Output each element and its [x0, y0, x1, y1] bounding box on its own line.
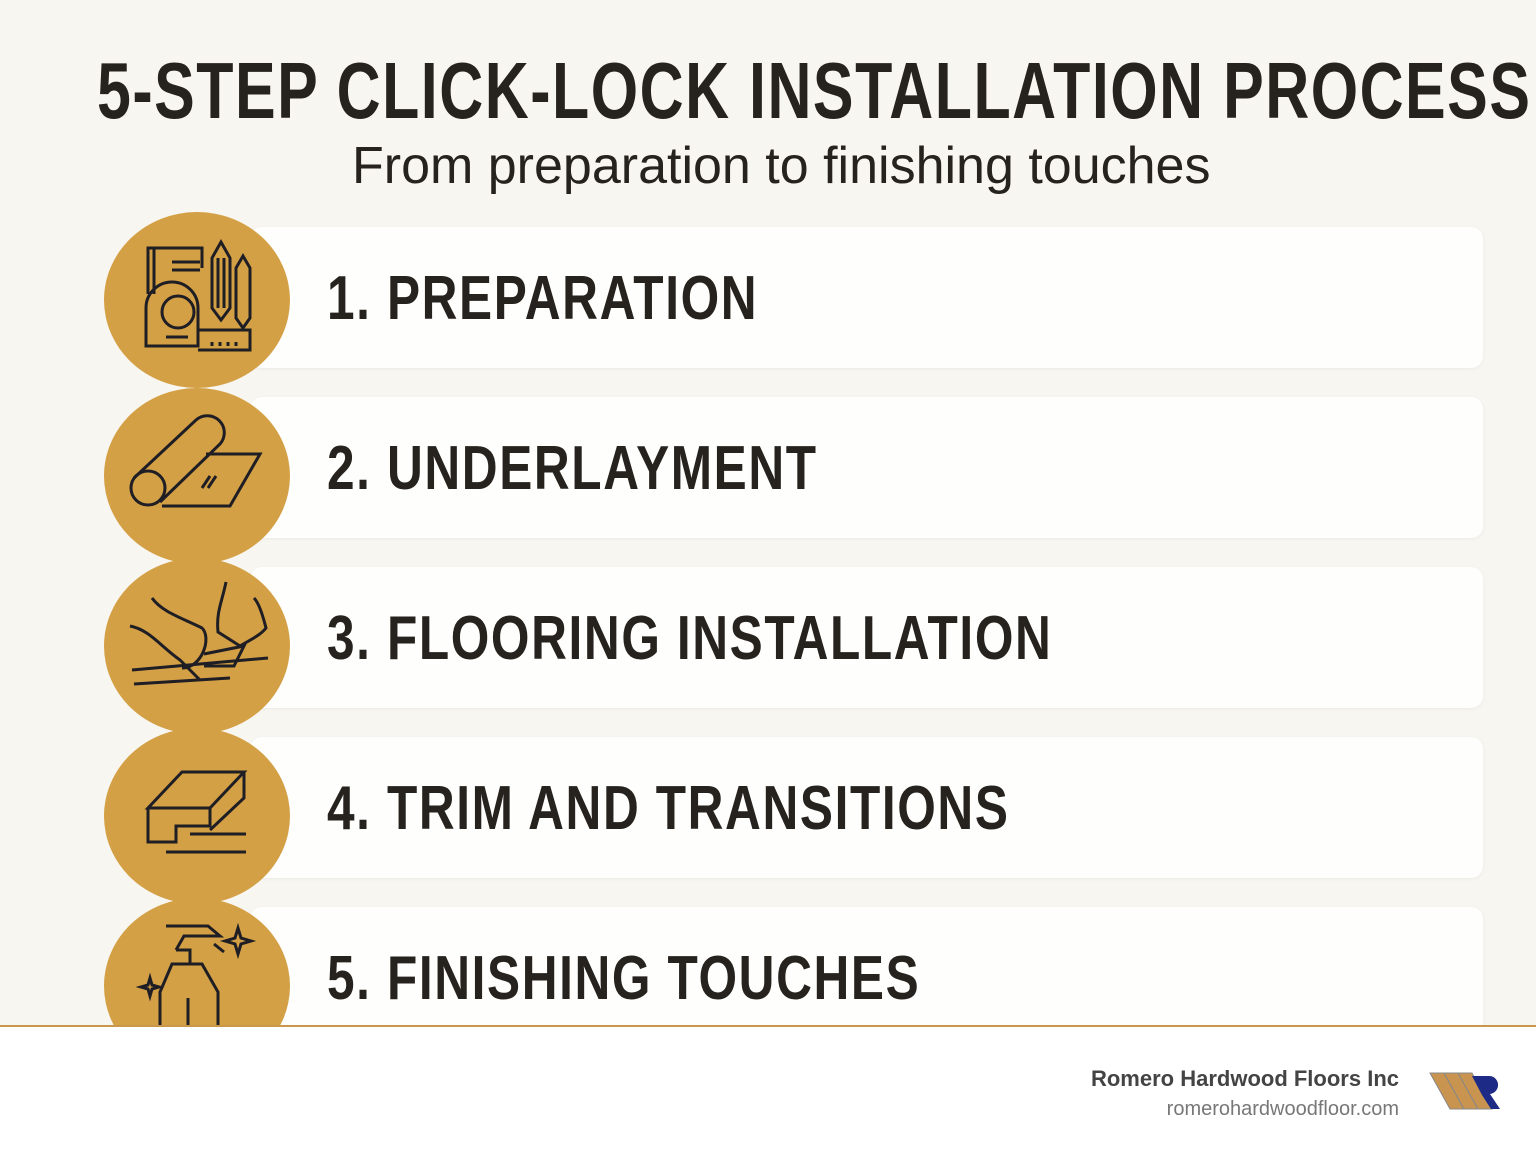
card: step 4 — [250, 737, 1483, 878]
icon: spray bottle — [104, 898, 290, 1074]
card: step 4: 4. TRIM AND TRANSITIONS — [327, 774, 1010, 843]
icon: preparation tools — [104, 212, 290, 388]
card: step 1: 1. PREPARATION — [327, 264, 758, 333]
card: step 1 — [250, 227, 1483, 368]
company name: Romero Hardwood Floors Inc — [1091, 1066, 1399, 1091]
title: 5-STEP CLICK-LOCK INSTALLATION PROCESS — [97, 46, 1531, 135]
website: romerohardwoodfloor.com — [1167, 1098, 1399, 1120]
icon: underlayment roll — [104, 388, 290, 564]
footer — [0, 1025, 1536, 1156]
card: step 2 — [250, 397, 1483, 538]
card: step 3: 3. FLOORING INSTALLATION — [327, 604, 1052, 673]
icon: hands installing — [104, 558, 290, 734]
card: step 5 — [250, 907, 1483, 1048]
icon: trim molding — [104, 728, 290, 904]
card: step 5: 5. FINISHING TOUCHES — [327, 944, 920, 1013]
card: step 2: 2. UNDERLAYMENT — [327, 434, 818, 503]
logo — [1429, 1072, 1500, 1110]
card: step 3 — [250, 567, 1483, 708]
subtitle: From preparation to finishing touches — [352, 137, 1210, 195]
